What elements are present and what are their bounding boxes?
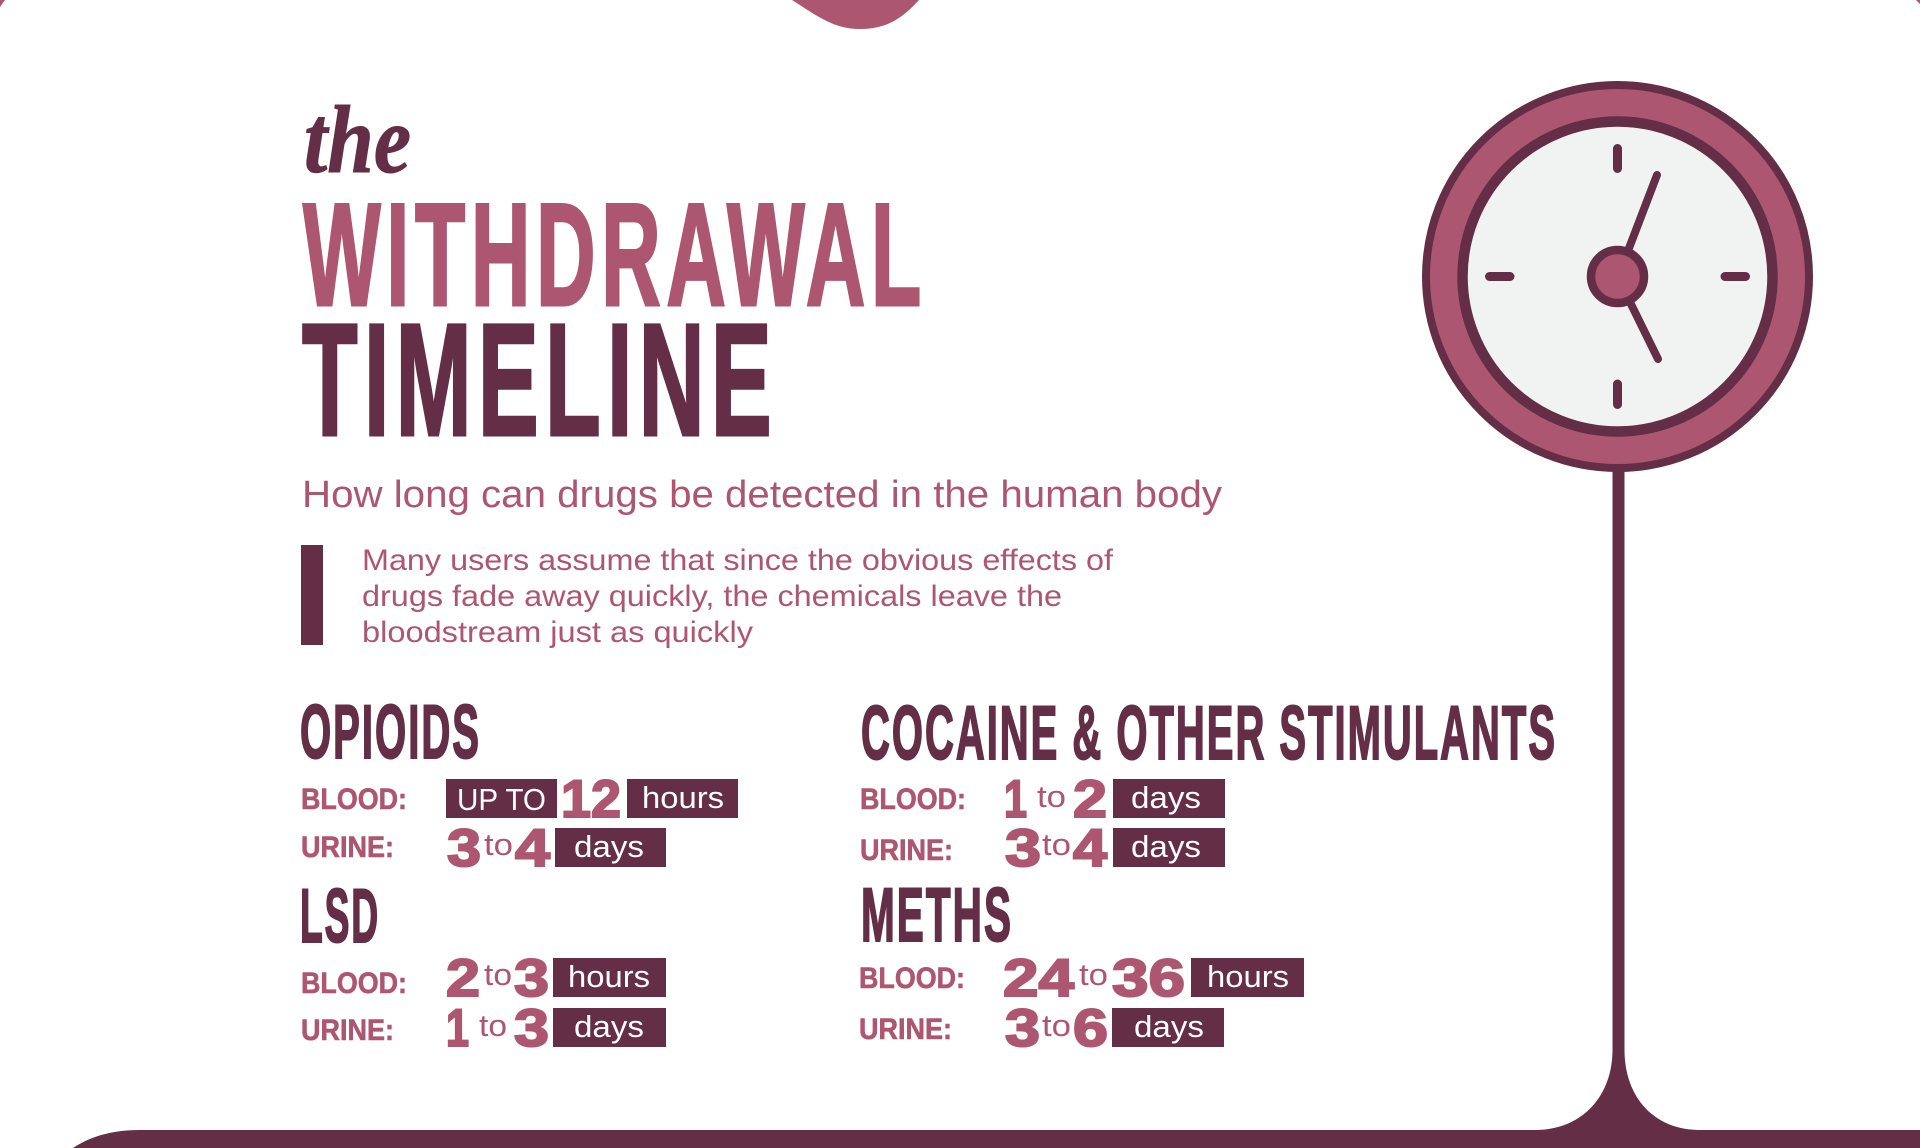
opioids urine row	[301, 819, 666, 878]
intro paragraph: Many users assume that since the obvious effects of	[362, 544, 1114, 577]
cocaine blood row: 1	[1004, 770, 1027, 829]
cocaine urine row	[860, 819, 1225, 878]
meths blood row: BLOOD:	[859, 962, 965, 995]
bottom band with timeline stem	[73, 470, 1920, 1148]
subtitle: How long can drugs be detected in the human body	[302, 474, 1222, 516]
intro paragraph	[362, 544, 1114, 649]
meths urine row: 6	[1073, 999, 1108, 1058]
meths blood row: 36	[1112, 949, 1185, 1008]
intro bar	[301, 545, 323, 645]
opioids urine row: 3	[447, 819, 481, 878]
cocaine urine row: to	[1042, 827, 1071, 862]
opioids urine row: 4	[515, 819, 551, 878]
meths blood row: hours	[1207, 959, 1289, 994]
meths blood row: to	[1079, 957, 1108, 992]
heading: meths: METHS	[861, 873, 1013, 958]
panel: cocaine and other stimulants	[860, 691, 1557, 878]
title	[302, 86, 927, 469]
lsd urine row: URINE:	[301, 1014, 394, 1047]
panel: meths	[859, 873, 1304, 1058]
opioids blood row: 12	[561, 770, 621, 829]
lsd urine row: 1	[446, 999, 469, 1058]
meths urine row	[859, 999, 1224, 1058]
meths urine row: days	[1134, 1009, 1204, 1044]
panel: lsd	[300, 874, 666, 1058]
opioids urine row: days	[574, 829, 644, 864]
meths urine row: 3	[1005, 999, 1040, 1058]
lsd blood row: 2	[446, 949, 480, 1008]
title: withdrawal: WITHDRAWAL	[303, 173, 927, 336]
opioids blood row: UP TO	[457, 782, 546, 817]
cocaine blood row: BLOOD:	[860, 783, 966, 816]
meths urine row: URINE:	[859, 1013, 952, 1046]
panel: opioids	[300, 690, 738, 878]
cocaine urine row: 4	[1073, 819, 1108, 878]
meths blood row: 24	[1003, 949, 1075, 1008]
icon: clock	[1426, 85, 1809, 468]
title: timeline: TIMELINE	[302, 290, 778, 469]
intro paragraph: drugs fade away quickly, the chemicals leave the	[362, 580, 1062, 613]
intro paragraph: bloodstream just as quickly	[362, 616, 753, 649]
cocaine blood row: 2	[1073, 770, 1107, 829]
cocaine urine row: URINE:	[860, 834, 953, 867]
opioids blood row: hours	[642, 780, 724, 815]
lsd urine row: to	[479, 1008, 507, 1043]
lsd blood row	[301, 949, 666, 1008]
opioids urine row: URINE:	[301, 831, 394, 864]
heading: opioids: OPIOIDS	[300, 690, 481, 775]
lsd blood row: BLOOD:	[301, 967, 407, 1000]
title: the: the	[304, 86, 411, 193]
lsd blood row: to	[484, 957, 512, 992]
lsd urine row	[301, 999, 666, 1058]
cocaine urine row: days	[1131, 829, 1201, 864]
cocaine blood row	[860, 770, 1225, 829]
lsd urine row: days	[574, 1009, 644, 1044]
top connector blob	[792, 0, 919, 29]
opioids blood row: BLOOD:	[301, 783, 407, 816]
cocaine blood row: days	[1131, 780, 1201, 815]
lsd urine row: 3	[514, 999, 549, 1058]
meths blood row	[859, 949, 1304, 1008]
top-right corner fragment	[1916, 0, 1920, 4]
lsd blood row: 3	[514, 949, 549, 1008]
cocaine urine row: 3	[1005, 819, 1041, 878]
opioids blood row	[301, 770, 738, 829]
meths urine row: to	[1042, 1008, 1071, 1043]
opioids urine row: to	[484, 827, 513, 862]
top-left corner fragment	[0, 0, 5, 7]
cocaine blood row: to	[1037, 779, 1066, 814]
panel: lsd: LSD	[300, 874, 380, 959]
lsd blood row: hours	[568, 959, 650, 994]
